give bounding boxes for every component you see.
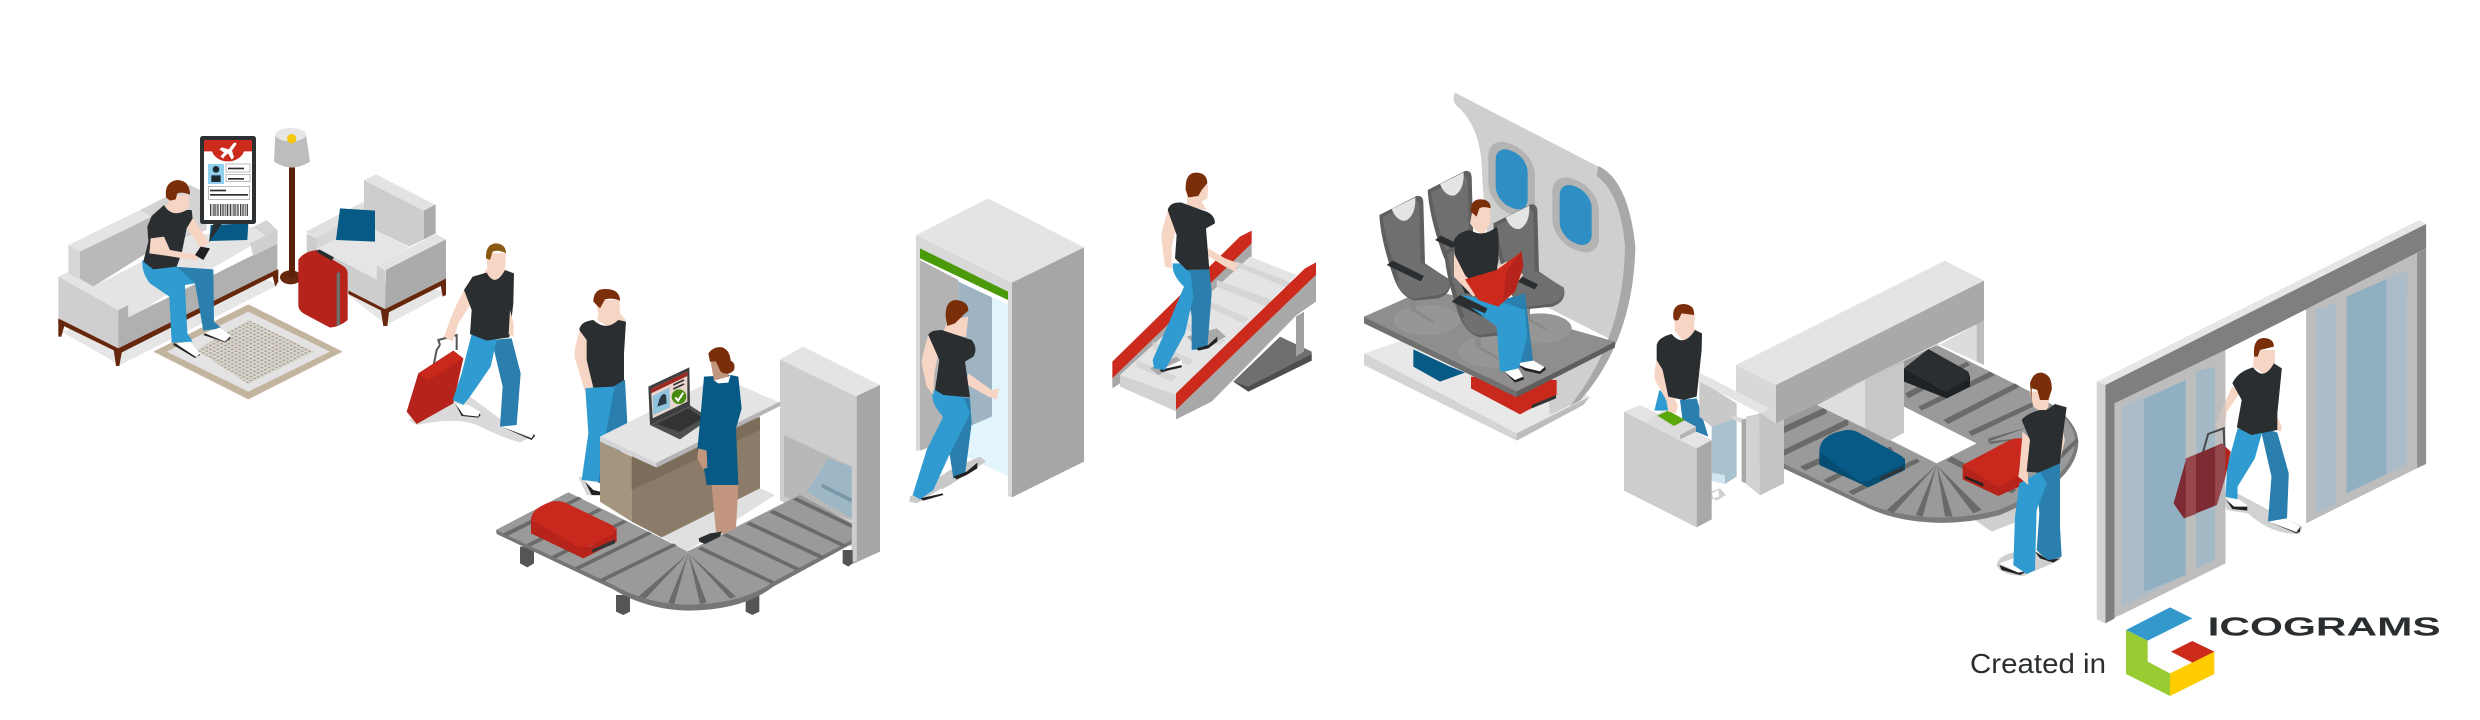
- window right: [1552, 171, 1599, 259]
- man on stairs: [1150, 173, 1238, 375]
- walk-through scanner: [916, 198, 1084, 497]
- man at the desk: [575, 289, 627, 497]
- armrest front: [1454, 295, 1487, 313]
- arch scanner: [1736, 261, 1984, 495]
- blue suitcase: [1819, 430, 1905, 487]
- logo mark: [2126, 607, 2214, 696]
- laptop with check mark: [648, 367, 710, 439]
- seat platform: [1364, 288, 1615, 397]
- scene: security gate: [909, 198, 1084, 503]
- sofa: [58, 185, 278, 366]
- scene: departure lounge: [58, 128, 535, 443]
- black suitcase: [1904, 349, 1970, 398]
- man entering scanner: [909, 300, 999, 503]
- blue sofa cushion: [209, 223, 248, 241]
- floor lamp: [274, 128, 310, 284]
- stairway: [1112, 231, 1316, 419]
- red suitcase on belt: [531, 501, 617, 558]
- logo: icograms: [2126, 607, 2441, 696]
- airplane seats: [1379, 171, 1564, 360]
- baggage belt: [1783, 345, 2078, 532]
- passport gate: [1624, 373, 1770, 527]
- man walking through door: [2215, 338, 2303, 534]
- check-in agent: [697, 347, 742, 544]
- red suitcase seen through glass: [2174, 400, 2231, 518]
- sliding door frame: [2097, 220, 2426, 623]
- scene: boarding stairs: [1112, 173, 1316, 419]
- scene: check-in desk: [496, 289, 880, 615]
- caption: created in: Created in: [1970, 648, 2106, 679]
- red suitcase on belt: [1963, 438, 2030, 496]
- walking man with suitcase: [407, 243, 535, 443]
- x-ray machine: [780, 347, 880, 564]
- fuselage wall: [1454, 93, 1635, 415]
- icon: boarding pass tablet: [200, 136, 256, 243]
- rug: [153, 304, 343, 399]
- scene: arrivals exit door: [2097, 220, 2426, 623]
- window left: [1488, 135, 1535, 224]
- baggage conveyor: [496, 492, 853, 615]
- luggage under seats: [1413, 349, 1557, 414]
- man at passport gate: [1654, 304, 1726, 501]
- red suitcase: [298, 249, 348, 328]
- logo wordmark: ICOGRAMS: [2208, 612, 2441, 642]
- check-in desk: [600, 377, 780, 552]
- seated passenger reading: [1454, 199, 1546, 383]
- man collecting bag: [1997, 373, 2067, 576]
- scene: aircraft cabin: [1364, 93, 1635, 441]
- lower floor: [1364, 337, 1590, 441]
- armchair: [306, 174, 446, 326]
- scene: passport control and baggage claim: [1624, 261, 2078, 576]
- seated man: [142, 180, 231, 358]
